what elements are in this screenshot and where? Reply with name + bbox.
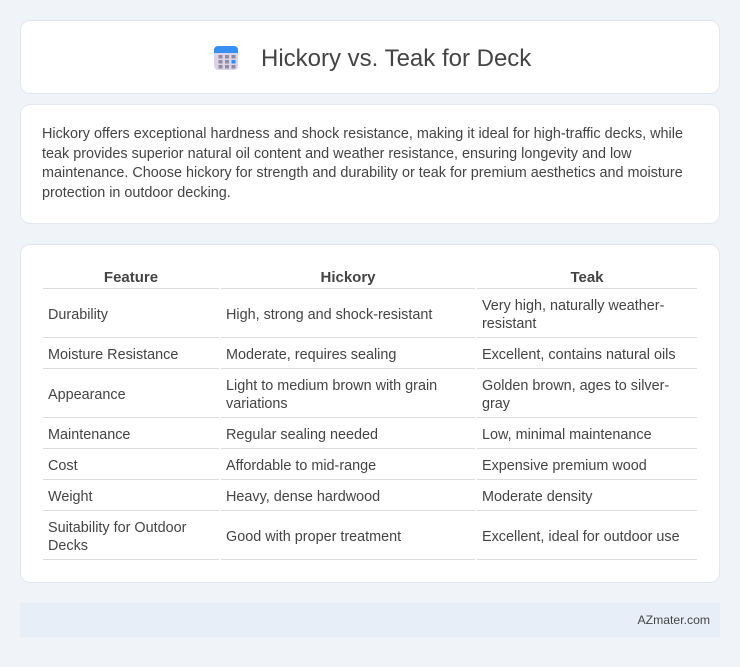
row: suitability: Decks <box>48 538 88 554</box>
text: Moderate density <box>482 489 592 505</box>
text: High, strong and shock-resistant <box>226 307 432 323</box>
table header: Teak <box>570 269 604 286</box>
row: suitability: Suitability for Outdoor <box>48 520 186 536</box>
row: cost: Cost <box>48 458 78 474</box>
summary text: protection in outdoor decking. <box>42 184 231 200</box>
text: variations <box>226 396 288 412</box>
row: moisture resistance: Moisture Resistance <box>48 347 178 363</box>
title: Hickory vs. Teak for Deck <box>261 45 531 72</box>
text: Light to medium brown with grain <box>226 378 437 394</box>
summary text: teak provides superior natural oil content and weather resistance, ensuring longevity and low <box>42 146 632 162</box>
row: suitability <box>48 520 186 554</box>
table header: Hickory <box>320 269 376 286</box>
text: Low, minimal maintenance <box>482 427 652 443</box>
text: Good with proper treatment <box>226 529 401 545</box>
text: Very high, naturally weather- <box>482 298 664 314</box>
row: weight: Weight <box>48 489 93 505</box>
text: Moderate, requires sealing <box>226 347 396 363</box>
row: durability: Durability <box>48 307 108 323</box>
summary text: maintenance. Choose hickory for strength and durability or teak for premium aesthetics and moisture <box>42 165 683 181</box>
text: Affordable to mid-range <box>226 458 376 474</box>
text: Regular sealing needed <box>226 427 378 443</box>
text: Expensive premium wood <box>482 458 647 474</box>
text: gray <box>482 396 510 412</box>
table header: Feature <box>104 269 158 286</box>
table header <box>104 269 604 286</box>
footer bar <box>20 603 720 637</box>
icon: calendar <box>214 46 238 70</box>
row: maintenance: Maintenance <box>48 427 130 443</box>
title card <box>20 20 720 94</box>
text: Heavy, dense hardwood <box>226 489 380 505</box>
text: Excellent, contains natural oils <box>482 347 676 363</box>
footer credit: AZmater.com <box>638 613 710 627</box>
summary text: Hickory offers exceptional hardness and shock resistance, making it ideal for high-traffic decks, while <box>42 126 683 142</box>
table card <box>20 244 720 583</box>
text: resistant <box>482 316 536 332</box>
summary card <box>20 104 720 224</box>
text: Excellent, ideal for outdoor use <box>482 529 680 545</box>
summary text <box>42 126 683 200</box>
row: appearance: Appearance <box>48 387 126 403</box>
text: Golden brown, ages to silver- <box>482 378 669 394</box>
